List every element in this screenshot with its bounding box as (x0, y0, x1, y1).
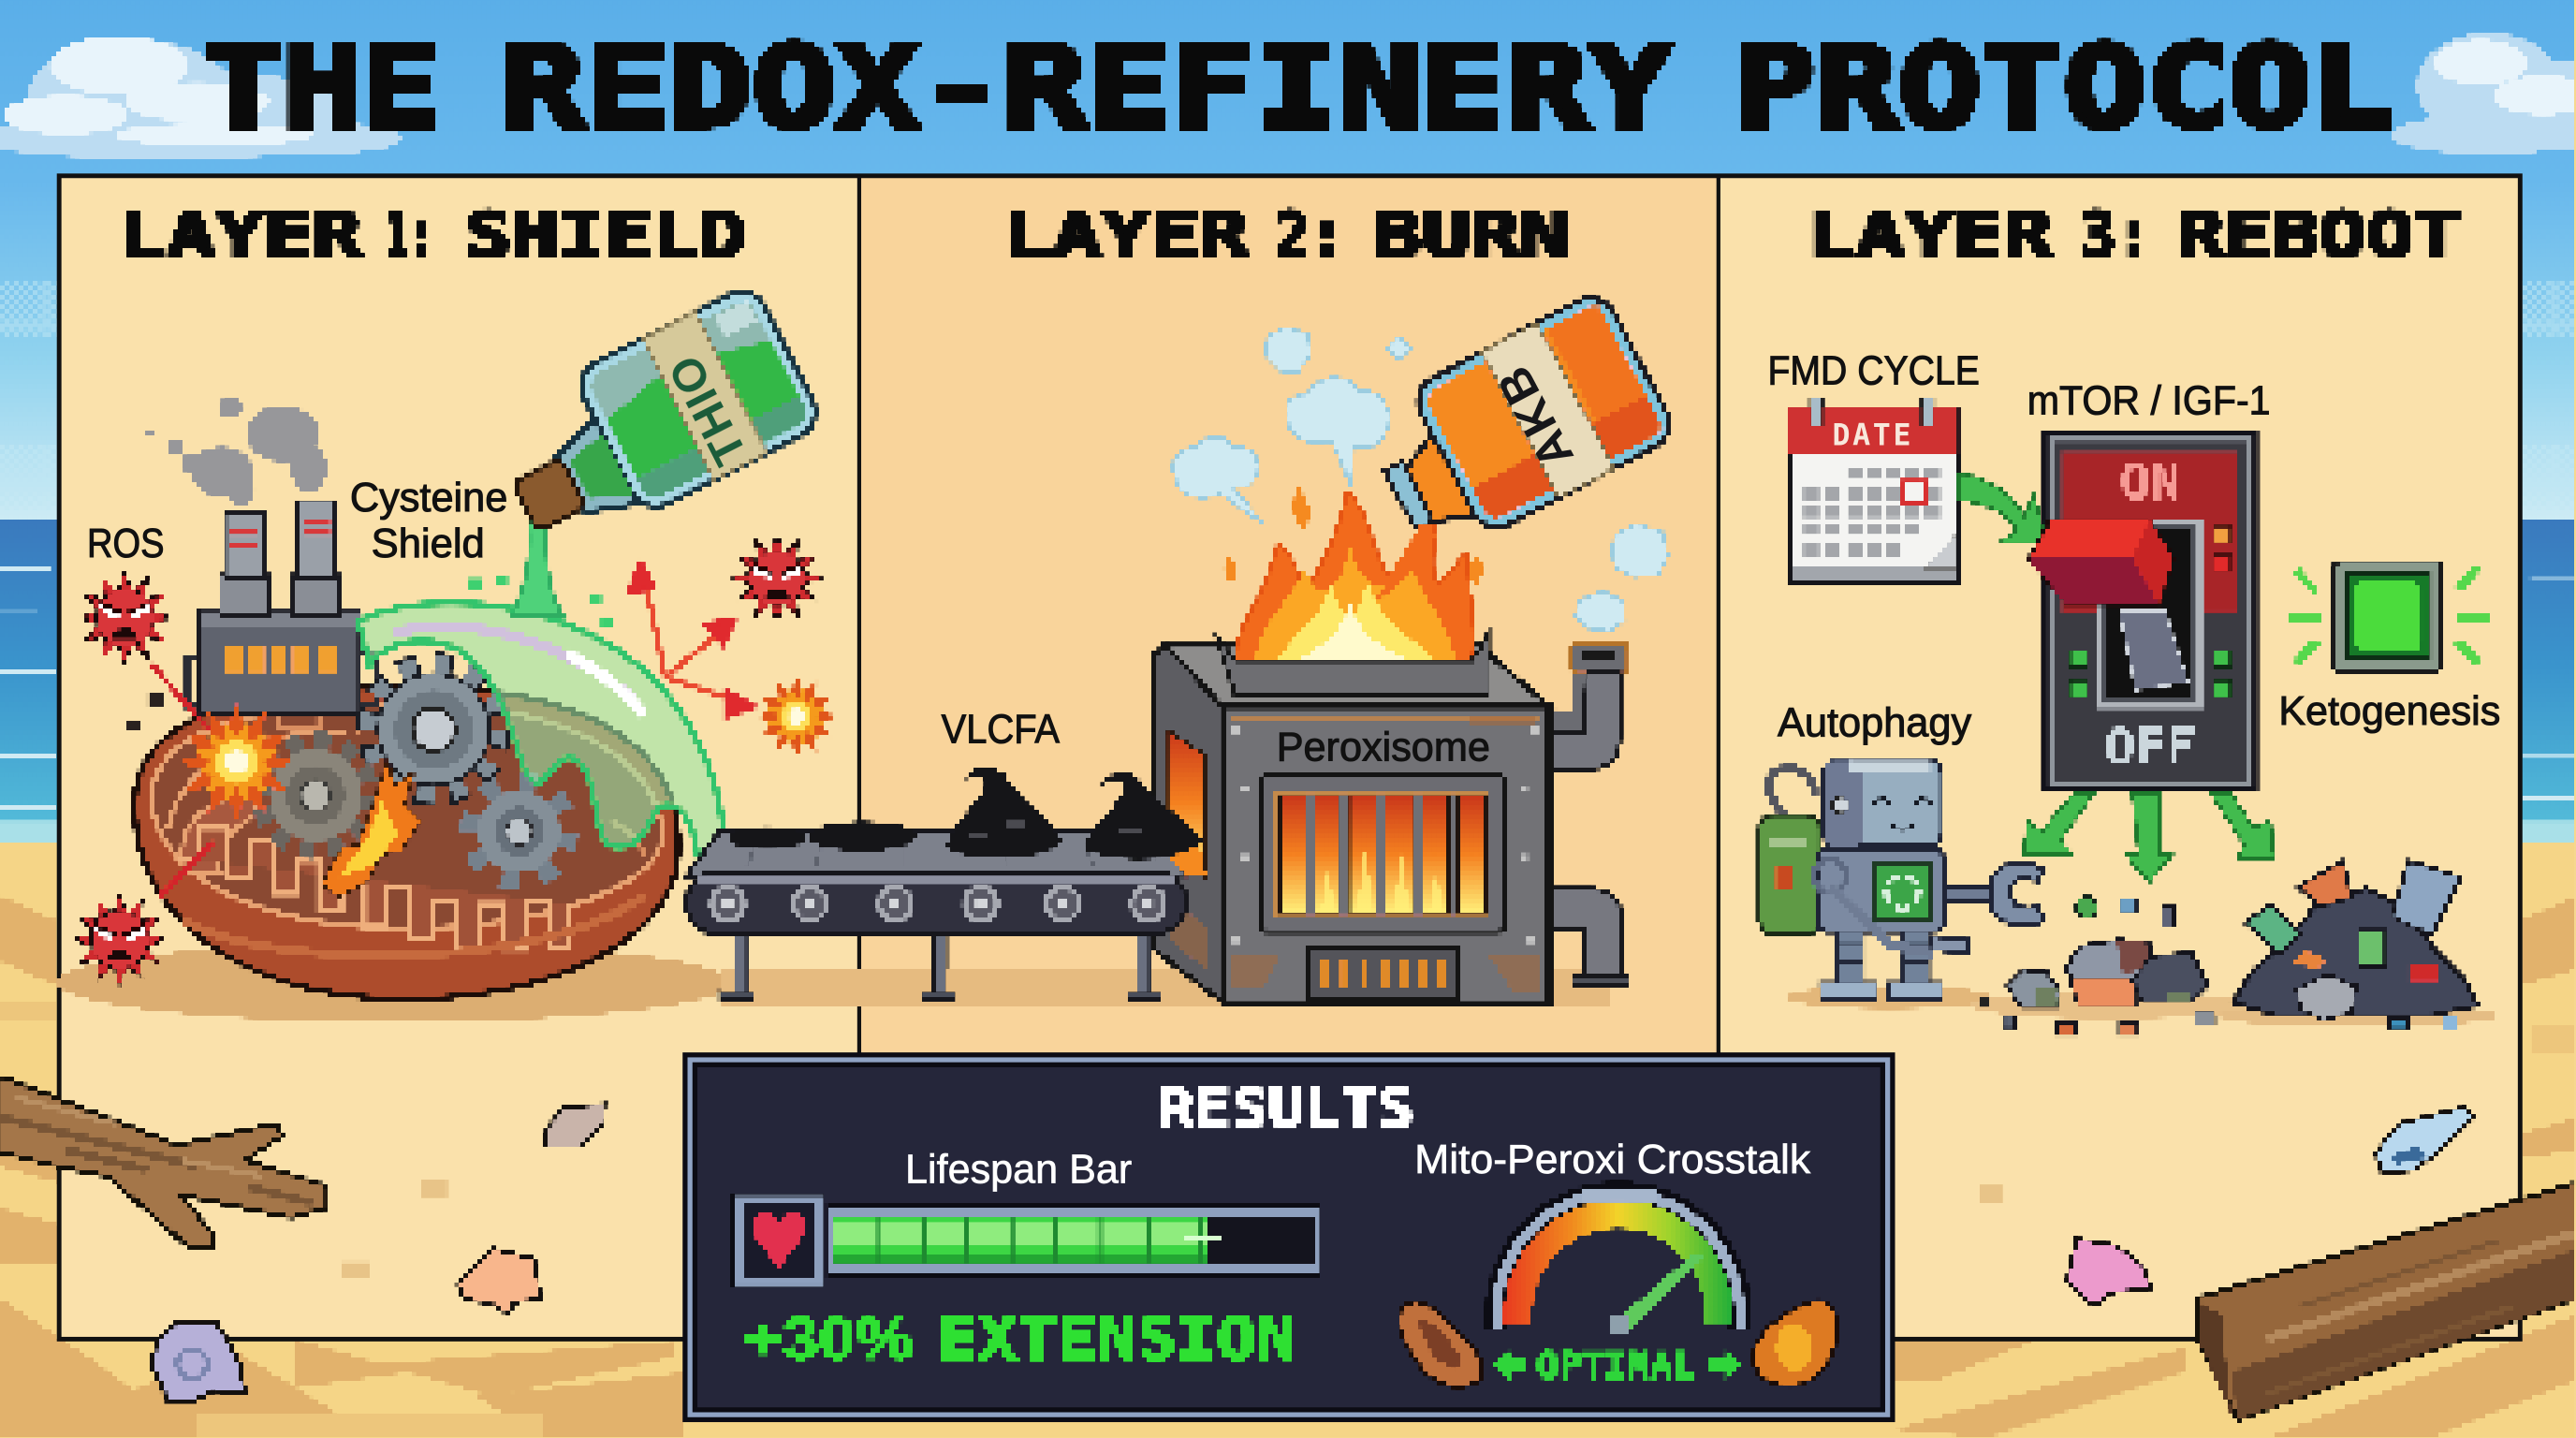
labels: FMD Cycle, mTOR, Ketogenesis, Autophagy (1767, 348, 2500, 745)
title (204, 22, 2393, 154)
panel: layer 2 burn (687, 198, 1677, 1005)
bottle label: THIO: THIO (659, 346, 757, 473)
labels: Lifespan Bar and Mito-Peroxi Crosstalk (905, 1137, 1810, 1193)
panel: layer 1 shield (57, 198, 837, 1022)
recycling robot (1760, 761, 2043, 1009)
mitochondrion (57, 687, 731, 1022)
mitochondrion icon (1399, 1302, 1483, 1387)
results frame (685, 1055, 1893, 1419)
labels: Lifespan Bar and Mito-Peroxi Crosstalk: Lifespan Bar (905, 1147, 1132, 1193)
conveyor belt (687, 831, 1186, 999)
ROS attack arrows (151, 664, 213, 897)
heading: layer 3 and switch states: OFF (2104, 717, 2197, 776)
scrap heap (2217, 861, 2497, 1029)
labels: VLCFA and Peroxisome: VLCFA (942, 706, 1061, 752)
heading: layer 3 and switch states: ON (2120, 453, 2181, 512)
labels: Lifespan Bar and Mito-Peroxi Crosstalk: Mito-Peroxi Crosstalk (1414, 1137, 1810, 1182)
labels: FMD Cycle, mTOR, Ketogenesis, Autophagy: Ketogenesis (2278, 688, 2500, 734)
green cysteine shield (359, 522, 724, 901)
smoke clouds (146, 398, 327, 506)
heading: layer 2: BURN (1373, 198, 1569, 271)
deflected arrows (629, 564, 754, 716)
VLCFA black goo blobs (728, 768, 1206, 877)
heading: layer 3 and switch states: LAYER (1808, 198, 2053, 271)
panel: layer 3 reboot (1760, 198, 2500, 1035)
driftwood left (0, 1077, 327, 1249)
bottle label: AKB: AKB (1486, 357, 1584, 477)
results heading and green values: RESULTS (1158, 1077, 1414, 1140)
heading: layer 1 (118, 198, 746, 271)
title: REDOX-REFINERY (501, 22, 1673, 154)
THIO bottle (482, 283, 824, 562)
results heading and green values: +30% (744, 1306, 914, 1372)
debris chips (128, 694, 163, 731)
optimal arrows (1493, 1351, 1741, 1380)
furnace flames (1216, 487, 1488, 697)
factory with two chimneys (187, 501, 376, 713)
heading: layer 2: LAYER (1003, 198, 1250, 271)
beach decorations: driftwood and shells (0, 1077, 2576, 1419)
title: THE (204, 22, 440, 154)
ketogenesis green chip (2291, 562, 2491, 670)
heading: layer 3 and switch states: 3: (2080, 198, 2152, 271)
shell blue (2376, 1108, 2474, 1173)
results panel (685, 1055, 1893, 1419)
ROS virus enemies (72, 533, 823, 988)
shell pink (2067, 1239, 2150, 1305)
results heading and green values: OPTIMAL (1536, 1344, 1695, 1388)
labels: VLCFA and Peroxisome: Peroxisome (1277, 725, 1490, 770)
heading: layer 2: 2: (1275, 198, 1344, 271)
gears (265, 668, 565, 877)
orange stream into the flames (1373, 522, 1436, 605)
green arrow from calendar to switch (1958, 473, 2047, 542)
results heading and green values: EXTENSION (938, 1303, 1296, 1372)
shell orange (459, 1249, 540, 1314)
snail shell (151, 1323, 245, 1400)
sand marks (342, 1180, 2001, 1278)
peroxisome furnace (1155, 644, 1630, 1003)
lifespan bar with heart (733, 1195, 1319, 1286)
heading: layer 3 and switch states (1808, 198, 2461, 776)
driftwood log right (2198, 1183, 2576, 1419)
crosstalk gauge (1399, 1188, 1837, 1387)
labels: FMD Cycle, mTOR, Ketogenesis, Autophagy: mTOR / IGF-1 (2027, 377, 2271, 423)
heading: layer 1: LAYER (118, 198, 362, 271)
peroxisome icon (1753, 1301, 1837, 1386)
AKB bottle (1357, 289, 1677, 564)
shell grey (546, 1104, 605, 1147)
labels: ROS and Cysteine Shield (87, 475, 507, 566)
results heading and green values (744, 1077, 1695, 1388)
FMD calendar (1789, 398, 1958, 581)
mTOR / IGF-1 toggle switch (2029, 433, 2256, 790)
heading: layer 2 (1003, 198, 1569, 271)
labels: FMD Cycle, mTOR, Ketogenesis, Autophagy: FMD CYCLE (1767, 348, 1980, 394)
labels: ROS and Cysteine Shield: ROS (87, 521, 165, 566)
heading: layer 1: SHIELD (465, 198, 746, 271)
calendar DATE heading: DATE (1833, 419, 1913, 453)
heading: layer 3 and switch states: REBOOT (2177, 198, 2461, 271)
heart icon (753, 1212, 805, 1269)
title: PROTOCOL (1734, 22, 2393, 154)
small rubble pieces (1971, 897, 2250, 1035)
explosions on the mitochondrion (178, 704, 420, 897)
panel frame: three-layer board (59, 176, 2520, 1339)
green down arrows from switch (2024, 794, 2274, 882)
labels: ROS and Cysteine Shield: Shield (372, 521, 485, 566)
labels: FMD Cycle, mTOR, Ketogenesis, Autophagy: Autophagy (1778, 699, 1971, 745)
labels: ROS and Cysteine Shield: Cysteine (350, 475, 507, 521)
spark burst (756, 676, 837, 756)
labels: VLCFA and Peroxisome (942, 706, 1490, 770)
heading: layer 1: 1: (385, 198, 433, 271)
steam clouds (1173, 327, 1667, 631)
